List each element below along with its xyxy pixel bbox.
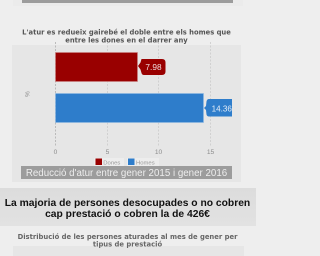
second chart title: tipus de prestació (93, 240, 162, 248)
legend: Dones (103, 160, 120, 166)
data label: 7.98 (138, 59, 166, 75)
caption bar: Reducció d'atur entre gener 2015 i gener 2016 (26, 168, 227, 179)
chart title: L'atur es redueix gairebé el doble entre els homes que (22, 28, 231, 36)
data label: 7.98: 7.98 (145, 62, 162, 72)
bar: Homes (56, 94, 204, 122)
legend: Homes (136, 160, 155, 166)
axis grid lines (56, 42, 210, 146)
section heading band: La majoria de persones desocupades o no cobren (5, 198, 250, 209)
background (0, 0, 256, 256)
second chart title: Distribució de les persones aturades al mes de gener per (18, 233, 238, 241)
panel: second chart (13, 246, 244, 256)
section heading band: cap prestació o cobren la de 426€ (45, 209, 210, 220)
data label: 14.36 (204, 99, 232, 116)
x axis labels (54, 149, 214, 156)
chart title (22, 28, 231, 44)
y axis label: % (24, 91, 32, 97)
section heading band (0, 188, 256, 226)
second chart title (18, 233, 238, 248)
x axis labels: 5 (106, 149, 110, 156)
x axis labels: 0 (54, 149, 58, 156)
chart title: entre les dones en el darrer any (65, 36, 188, 44)
legend (94, 158, 159, 166)
x axis labels: 10 (155, 149, 162, 156)
panel: bar chart (12, 42, 241, 182)
data label: 14.36: 14.36 (212, 104, 232, 114)
x axis labels: 15 (207, 149, 214, 156)
bar: Dones (56, 52, 138, 82)
panel: previous chart remnant (13, 0, 243, 6)
